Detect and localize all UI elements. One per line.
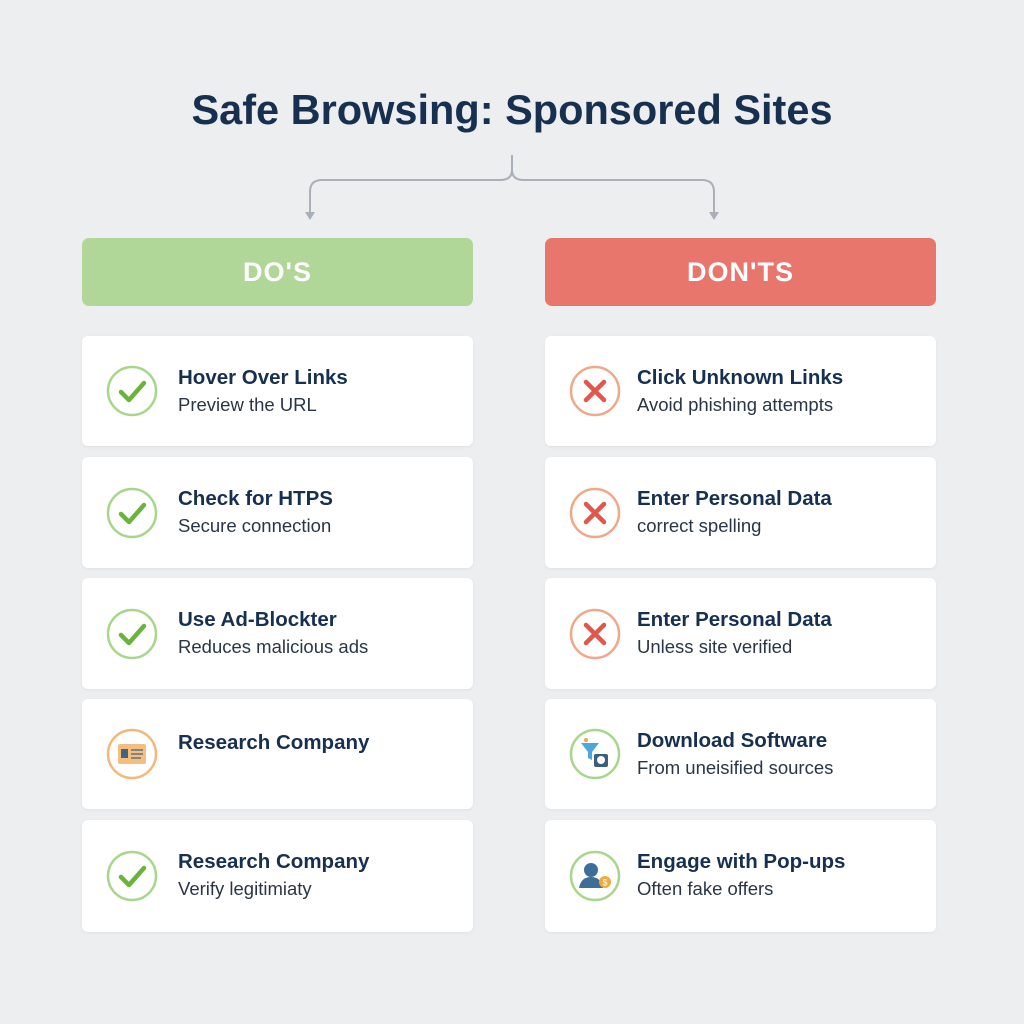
card: ad-blocker — [82, 578, 473, 689]
card: enter personal data verified — [545, 578, 936, 689]
icon: x — [570, 366, 620, 416]
header: do's: DO'S — [243, 257, 312, 287]
card: check for https: Check for HTPS — [178, 487, 333, 510]
header: do's — [82, 238, 473, 306]
card: research company verify: Verify legitimiaty — [178, 878, 312, 899]
card: engage with pop-ups: Engage with Pop-ups — [637, 850, 845, 873]
card: enter personal data verified: Unless site verified — [637, 636, 792, 657]
card: download software: Download Software — [637, 729, 827, 752]
card: enter personal data spelling: Enter Personal Data — [637, 487, 832, 510]
arrow: bracket splitting to both columns — [305, 155, 719, 220]
title: Safe Browsing: Sponsored Sites — [191, 86, 833, 133]
icon: person with coin: $ — [602, 878, 608, 888]
card: enter personal data spelling: correct spelling — [637, 515, 761, 536]
card: click unknown links: Click Unknown Links — [637, 366, 843, 389]
card: click unknown links — [545, 336, 936, 446]
card: research company — [82, 699, 473, 809]
icon: funnel — [570, 728, 620, 780]
header: don'ts: DON'TS — [687, 257, 794, 287]
card: engage with pop-ups: Often fake offers — [637, 878, 773, 899]
card: check for https — [82, 457, 473, 568]
header: don'ts — [545, 238, 936, 306]
card: research company verify — [82, 820, 473, 932]
icon: x — [570, 488, 620, 538]
card: enter personal data spelling — [545, 457, 936, 568]
card: hover over links: Hover Over Links — [178, 366, 348, 389]
icon: person with coin — [570, 850, 620, 902]
icon: check — [106, 608, 158, 660]
card: download software: From uneisified sources — [637, 757, 833, 778]
icon: check — [106, 488, 158, 538]
card: click unknown links: Avoid phishing attempts — [637, 394, 833, 415]
card: hover over links: Preview the URL — [178, 394, 317, 415]
icon: check — [106, 850, 158, 902]
card: engage with pop-ups — [545, 820, 936, 932]
icon: id card — [106, 728, 158, 780]
card: download software — [545, 699, 936, 809]
card: ad-blocker: Use Ad-Blockter — [178, 608, 337, 631]
card: enter personal data verified: Enter Personal Data — [637, 608, 832, 631]
icon: check — [106, 366, 158, 416]
card: hover over links — [82, 336, 473, 446]
card: research company: Research Company — [178, 731, 369, 754]
card: ad-blocker: Reduces malicious ads — [178, 636, 368, 657]
card: check for https: Secure connection — [178, 515, 331, 536]
icon: x — [570, 608, 620, 660]
card: research company verify: Research Company — [178, 850, 369, 873]
